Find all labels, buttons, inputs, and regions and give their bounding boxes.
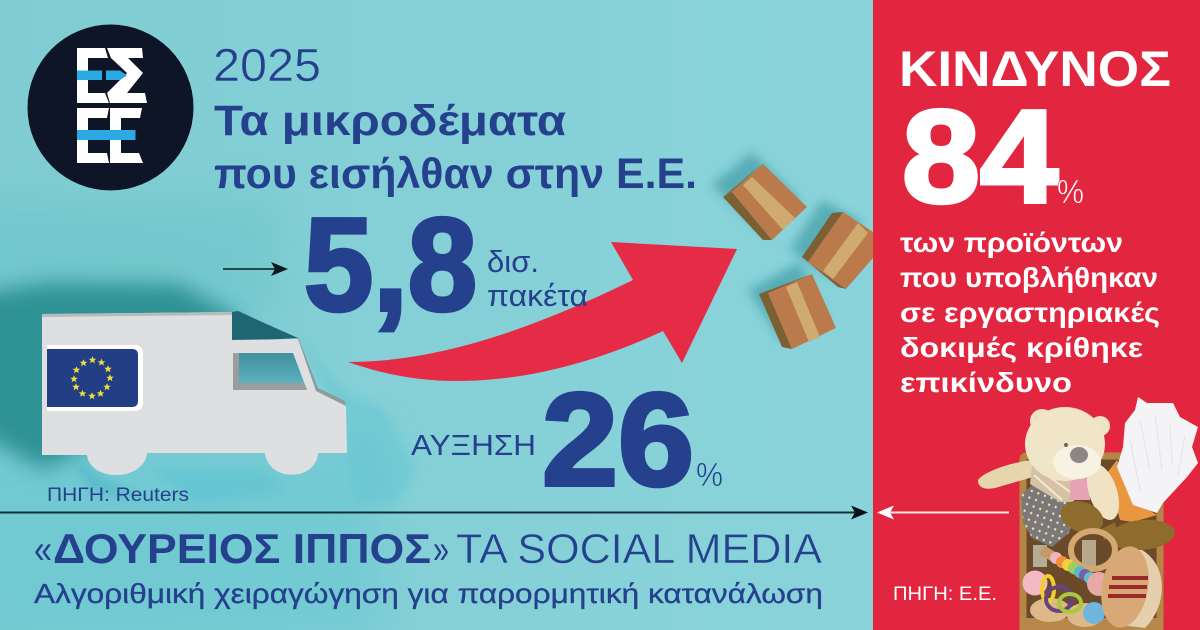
heading: risk: ΚΙΝΔΥΝΟΣ	[899, 41, 1171, 97]
stat: 5,8 billion parcels	[304, 191, 588, 338]
text block: risk explanation	[900, 227, 1160, 398]
flag	[47, 345, 143, 411]
source: Reuters: ΠΗΓΗ: Reuters	[47, 485, 189, 506]
bear	[978, 407, 1125, 567]
stat: 26% increase: %	[696, 456, 723, 493]
stat: 84%: %	[1057, 173, 1084, 210]
logo: circular emblem	[28, 24, 194, 190]
icon: basket of toys	[978, 397, 1198, 630]
icon: white truck with EU flag	[42, 311, 347, 475]
stat: 5,8 billion parcels: δισ.	[487, 244, 539, 279]
stat: 5,8 billion parcels: πακέτα	[487, 278, 588, 313]
arrow: white reverse arrow	[877, 506, 1009, 520]
stat: 26% increase: ΑΥΞΗΣΗ	[411, 430, 536, 462]
source: E.E.: ΠΗΓΗ: Ε.Ε.	[893, 584, 997, 605]
text block: risk explanation: των προϊόντων	[900, 227, 1123, 258]
heading: Trojan horse	[34, 525, 822, 572]
text block: risk explanation: που υποβλήθηκαν	[900, 262, 1158, 293]
arrow: red growth arrow	[348, 242, 737, 381]
heading: Trojan horse: ΔΟΥΡΕΙΟΣ ΙΠΠΟΣ	[53, 525, 431, 572]
heading: Trojan horse: »	[433, 528, 449, 572]
title block: που εισήλθαν στην Ε.Ε.	[214, 150, 697, 198]
stat: 84%: 84	[902, 83, 1058, 230]
stat: 5,8 billion parcels: 5,8	[304, 191, 477, 338]
icon: boxes	[712, 152, 873, 349]
stat: 26% increase	[411, 366, 723, 513]
subheading: Αλγοριθμική χειραγώγηση για παρορμητική κατανάλωση	[34, 578, 823, 609]
stat: 26% increase: 26	[542, 366, 694, 513]
wooden rattle	[1022, 531, 1115, 627]
title block: Τα μικροδέματα	[214, 97, 566, 145]
title block: 2025	[213, 39, 321, 91]
title block	[213, 39, 697, 198]
arrow: long black divider arrow	[0, 506, 868, 520]
heading: Trojan horse: «	[34, 528, 52, 572]
text block: risk explanation: επικίνδυνο	[900, 367, 1072, 398]
wooden brush	[1101, 546, 1162, 628]
heading: Trojan horse: ΤΑ SOCIAL MEDIA	[456, 525, 822, 572]
background: teal paper	[0, 185, 414, 630]
arrow: pointing to 5,8	[223, 262, 288, 276]
panel: red risk panel background	[873, 0, 1200, 630]
towel	[1107, 397, 1198, 522]
muslin leaves	[1060, 501, 1175, 550]
text block: risk explanation: δοκιμές κρίθηκε	[900, 332, 1143, 363]
text block: risk explanation: σε εργαστηριακές	[900, 297, 1160, 328]
